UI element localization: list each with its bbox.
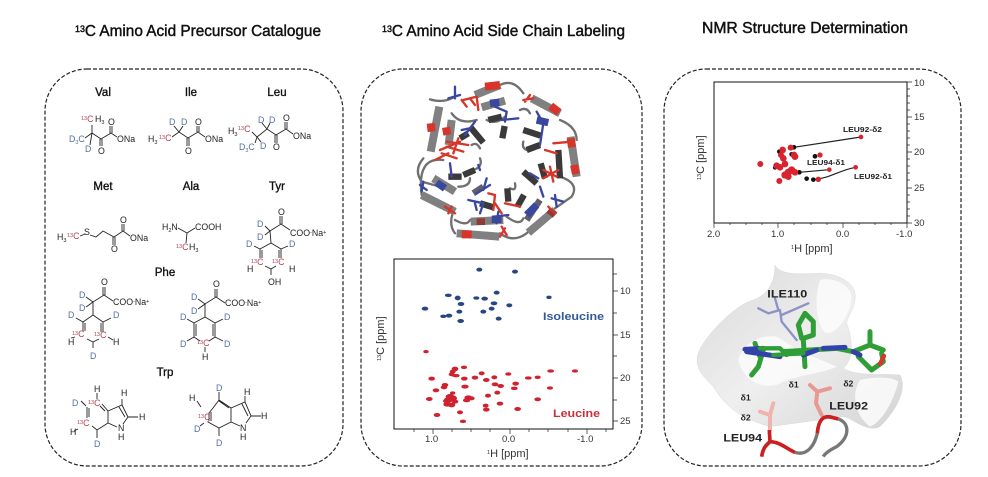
molecule: Trp 1: D xyxy=(94,439,100,449)
molecule: Val: O xyxy=(108,117,115,127)
molecule: Tyr: Na xyxy=(312,228,323,238)
molecule: Phe 2: D xyxy=(180,312,186,322)
chemical shift perturbation plot: 30 xyxy=(914,218,925,229)
chemical shift perturbation plot: 15 xyxy=(914,112,925,123)
molecule: Trp 2: D xyxy=(216,383,222,393)
molecule: Met: H xyxy=(57,232,63,242)
molecule: Phe 1: Phe xyxy=(155,267,175,279)
delta labels: δ1 xyxy=(789,380,799,390)
panel: precursor catalogue xyxy=(45,69,343,466)
HSQC spectrum: isoleucine and leucine: 1.0 xyxy=(425,434,438,445)
delta labels: δ2 xyxy=(741,413,751,423)
molecule: Ile: Ile xyxy=(185,87,197,99)
molecule: Phe 2 xyxy=(180,279,261,362)
molecule: Phe 2: O xyxy=(213,279,220,289)
molecule: Phe 1: C xyxy=(100,330,107,340)
molecule: Phe 1: C xyxy=(78,329,85,339)
molecule: Trp 1: H xyxy=(70,427,76,437)
HSQC spectrum: isoleucine and leucine xyxy=(375,259,631,460)
chemical shift perturbation plot: 0.0 xyxy=(836,229,849,240)
HSQC spectrum: isoleucine and leucine: 25 xyxy=(620,416,631,427)
molecule: Val xyxy=(69,87,135,156)
molecule: Tyr: 13 xyxy=(272,259,278,265)
molecule: Leu: C xyxy=(244,124,251,134)
chemical shift perturbation plot: 1.0 xyxy=(771,229,784,240)
molecule: Met xyxy=(57,181,148,254)
molecule: Phe 2: D xyxy=(224,339,230,349)
molecule: Met: ONa xyxy=(130,233,148,243)
molecule: Phe 1 xyxy=(68,267,175,361)
molecule: Phe 2: D xyxy=(224,312,230,322)
molecule: Tyr: COO xyxy=(290,228,310,238)
molecule: Met: O xyxy=(120,215,127,225)
title: side chain labeling: 13 xyxy=(382,24,392,34)
molecule: Phe 1: D xyxy=(113,310,119,320)
peak labels: LEU94-δ1 xyxy=(807,160,845,167)
molecule: Met: 3 xyxy=(63,238,66,244)
molecule: Val: H xyxy=(95,114,101,124)
protein ring structure xyxy=(418,83,577,238)
molecule: Val: D xyxy=(69,134,75,144)
y axis label: C [ppm] xyxy=(695,135,707,174)
molecule: Tyr: D xyxy=(257,232,263,242)
molecule: Trp 1: C xyxy=(83,418,90,428)
molecule: Leu: D xyxy=(239,142,245,152)
molecule: Leu: O xyxy=(273,142,280,152)
label: ILE110: ILE110 xyxy=(767,289,807,301)
shift data points xyxy=(757,135,863,184)
chemical shift perturbation plot: -1.0 xyxy=(896,229,912,240)
molecule: Leu: C xyxy=(248,142,255,152)
molecule: Trp 2: D xyxy=(216,438,222,448)
title: NMR structure determination: NMR Structure Determination xyxy=(702,20,908,37)
peak labels xyxy=(807,127,892,181)
x axis label: H [ppm] xyxy=(490,448,529,460)
molecule: Phe 1: + xyxy=(146,299,149,305)
molecule: Phe 1: O xyxy=(101,277,108,287)
molecule: Phe 2: 13 xyxy=(197,340,203,346)
molecule: Trp 1: 13 xyxy=(77,420,83,426)
molecule: Val: 3 xyxy=(101,120,104,126)
HSQC spectrum: isoleucine and leucine: 20 xyxy=(620,373,631,384)
molecule: Met: Met xyxy=(93,181,113,193)
label: Isoleucine: Isoleucine xyxy=(543,311,604,323)
molecule: Trp 2: H xyxy=(244,387,250,397)
panel: NMR structure determination xyxy=(664,69,961,466)
molecule: Tyr: - xyxy=(310,230,312,236)
y axis label: 13 xyxy=(697,174,703,180)
molecule: Trp 2: C xyxy=(204,412,211,422)
molecule: Met: 13 xyxy=(67,233,73,239)
molecule: Phe 2: + xyxy=(258,300,261,306)
molecule: Tyr: D xyxy=(289,239,295,249)
peak labels: LEU92-δ2 xyxy=(843,127,882,134)
molecule: Ala: C xyxy=(182,242,189,252)
molecule: Ala: H xyxy=(162,222,168,232)
molecule: Trp 2: N xyxy=(240,423,246,433)
title: side chain labeling: C Amino Acid Side Chain Labeling xyxy=(392,23,625,40)
molecule: Tyr: O xyxy=(278,207,285,217)
molecule: Phe 2: Na xyxy=(247,298,258,308)
molecule: Tyr xyxy=(246,181,326,287)
molecule: Val: C xyxy=(78,134,85,144)
molecule: Ala: 2 xyxy=(168,228,171,234)
molecule: Ile: H xyxy=(148,134,154,144)
molecule: Leu: 13 xyxy=(238,126,244,132)
molecule: Trp 2: D xyxy=(194,424,200,434)
molecule: Tyr: D xyxy=(246,239,252,249)
molecule: Ile: 3 xyxy=(154,140,157,146)
molecule: Trp 1 xyxy=(70,367,173,449)
molecule: Phe 2: D xyxy=(191,306,197,316)
molecule: Trp 1: C xyxy=(94,398,101,408)
molecule: Leu: Leu xyxy=(267,87,287,99)
molecule: Trp 2 xyxy=(189,383,267,448)
protein backbone loop xyxy=(762,417,847,457)
molecule: Ala: N xyxy=(171,222,178,232)
molecule: Phe 1: H xyxy=(113,337,119,347)
molecule: Ala: 13 xyxy=(176,244,182,250)
title: precursor catalogue: 13 xyxy=(75,24,85,34)
molecule: Leu: 3 xyxy=(234,132,237,138)
molecule: Phe 2: - xyxy=(245,300,247,306)
molecule: Phe 2: C xyxy=(203,338,210,348)
molecule: Val: O xyxy=(98,146,105,156)
molecule: Met: C xyxy=(73,231,80,241)
molecule: Tyr: 13 xyxy=(251,259,257,265)
molecule: Tyr: D xyxy=(257,219,263,229)
peak labels: LEU92-δ1 xyxy=(854,174,892,181)
delta labels: δ2 xyxy=(843,379,854,389)
x axis label: 1 xyxy=(791,245,794,251)
molecule: Tyr: C xyxy=(278,257,285,267)
chemical shift perturbation plot: 2.0 xyxy=(707,229,720,240)
HSQC spectrum: isoleucine and leucine: 15 xyxy=(620,330,631,341)
molecule: Phe 1: 13 xyxy=(72,331,78,337)
molecule: Phe 1: 13 xyxy=(94,332,100,338)
y axis label: C [ppm] xyxy=(375,316,387,355)
molecule: Trp 2: H xyxy=(261,411,267,421)
molecule: Leu: 3 xyxy=(245,148,248,154)
molecule: Ala xyxy=(162,181,221,254)
residue sticks: ILE110 xyxy=(758,298,808,340)
molecule: Trp 2: H xyxy=(189,393,195,403)
molecule: Leu: D xyxy=(260,141,266,151)
molecule: Trp 1: H xyxy=(94,384,100,394)
x axis label: H [ppm] xyxy=(794,243,833,255)
molecule: Leu: ONa xyxy=(293,131,311,141)
molecule: Phe 1: D xyxy=(68,310,74,320)
molecule: Leu: O xyxy=(283,113,290,123)
molecule: Tyr: OH xyxy=(268,277,281,287)
molecule: Ile: O xyxy=(195,117,202,127)
molecule: Ile: D xyxy=(169,117,175,127)
molecule: Ile: ONa xyxy=(205,134,223,144)
molecule: Ile xyxy=(148,87,223,156)
molecule: Ile: C xyxy=(165,133,172,143)
chemical shift perturbation plot: 10 xyxy=(914,78,925,89)
molecule: Phe 1: D xyxy=(90,351,96,361)
delta labels: δ1 xyxy=(741,392,751,402)
molecule: Ile: O xyxy=(185,146,192,156)
molecule: Trp 2: H xyxy=(240,432,246,442)
molecule: Trp 2: 13 xyxy=(198,414,204,420)
molecule: Trp 1: H xyxy=(139,412,145,422)
x axis label: 1 xyxy=(487,450,490,456)
delta labels xyxy=(741,379,854,423)
molecule: Leu: H xyxy=(228,126,234,136)
molecule: Trp 1: 13 xyxy=(88,400,94,406)
molecule: Tyr: + xyxy=(323,230,326,236)
molecule: Tyr: Tyr xyxy=(269,181,285,193)
residue sticks: LEU94 xyxy=(760,403,773,430)
molecule: Tyr: C xyxy=(257,257,264,267)
molecule: Phe 1: COO xyxy=(113,297,133,307)
molecule: Phe 1: D xyxy=(79,290,85,300)
ligand sticks xyxy=(745,313,884,375)
molecule: Phe 1: H xyxy=(68,337,74,347)
molecule: Val: C xyxy=(87,114,94,124)
molecule: Met: S xyxy=(84,227,90,237)
molecule: Ala: 3 xyxy=(195,248,198,254)
label: Leucine: Leucine xyxy=(553,408,600,420)
molecule: Val: 3 xyxy=(75,140,78,146)
ligand binding site surface xyxy=(697,265,902,457)
molecule: Phe 1: - xyxy=(133,299,135,305)
molecule: Trp 1: H xyxy=(118,432,124,442)
molecule: Ala: H xyxy=(189,242,195,252)
molecule: Phe 2: H xyxy=(202,352,208,362)
chemical shift perturbation plot: 25 xyxy=(914,183,925,194)
molecule: Phe 2: D xyxy=(180,339,186,349)
residue sticks: LEU92 xyxy=(810,385,830,415)
y axis label: 13 xyxy=(377,355,383,361)
leucine peaks xyxy=(424,350,578,423)
molecule: Val: 13 xyxy=(81,116,87,122)
molecule: Leu: D xyxy=(258,115,264,125)
HSQC spectrum: isoleucine and leucine: 0.0 xyxy=(502,434,515,445)
molecule: Tyr: H xyxy=(289,264,295,274)
molecule: Ile: D xyxy=(181,117,187,127)
isoleucine peaks xyxy=(422,268,551,323)
label: LEU92: LEU92 xyxy=(829,400,868,412)
molecule: Trp 1: Trp xyxy=(157,367,173,379)
label: LEU94: LEU94 xyxy=(723,433,763,445)
molecule: Leu xyxy=(228,87,311,154)
molecule: Ala: COOH xyxy=(195,222,221,232)
chemical shift perturbation plot xyxy=(695,78,925,255)
molecule: Ile: 13 xyxy=(159,135,165,141)
molecule: Tyr: H xyxy=(247,264,253,274)
molecule: Trp 1: N xyxy=(118,423,124,433)
title: precursor catalogue: C Amino Acid Precursor Catalogue xyxy=(85,23,321,40)
panel: side chain labeling xyxy=(361,69,642,466)
molecule: Phe 1: D xyxy=(79,303,85,313)
molecule: Trp 1: D xyxy=(72,398,78,408)
molecule: Leu: D xyxy=(269,115,275,125)
molecule: Val: Val xyxy=(95,87,111,99)
molecule: Phe 2: COO xyxy=(225,298,245,308)
molecule: Ala: Ala xyxy=(183,181,200,193)
HSQC spectrum: isoleucine and leucine: 10 xyxy=(620,286,631,297)
molecule: Phe 2: D xyxy=(191,292,197,302)
molecule: Phe 1: Na xyxy=(135,297,146,307)
molecule: Trp 1: H xyxy=(121,388,127,398)
HSQC spectrum: isoleucine and leucine: -1.0 xyxy=(577,434,593,445)
chemical shift perturbation plot: 20 xyxy=(914,147,925,158)
molecule: Met: O xyxy=(111,244,118,254)
molecule: Val: ONa xyxy=(117,134,135,144)
molecule: Val: D xyxy=(85,144,91,154)
